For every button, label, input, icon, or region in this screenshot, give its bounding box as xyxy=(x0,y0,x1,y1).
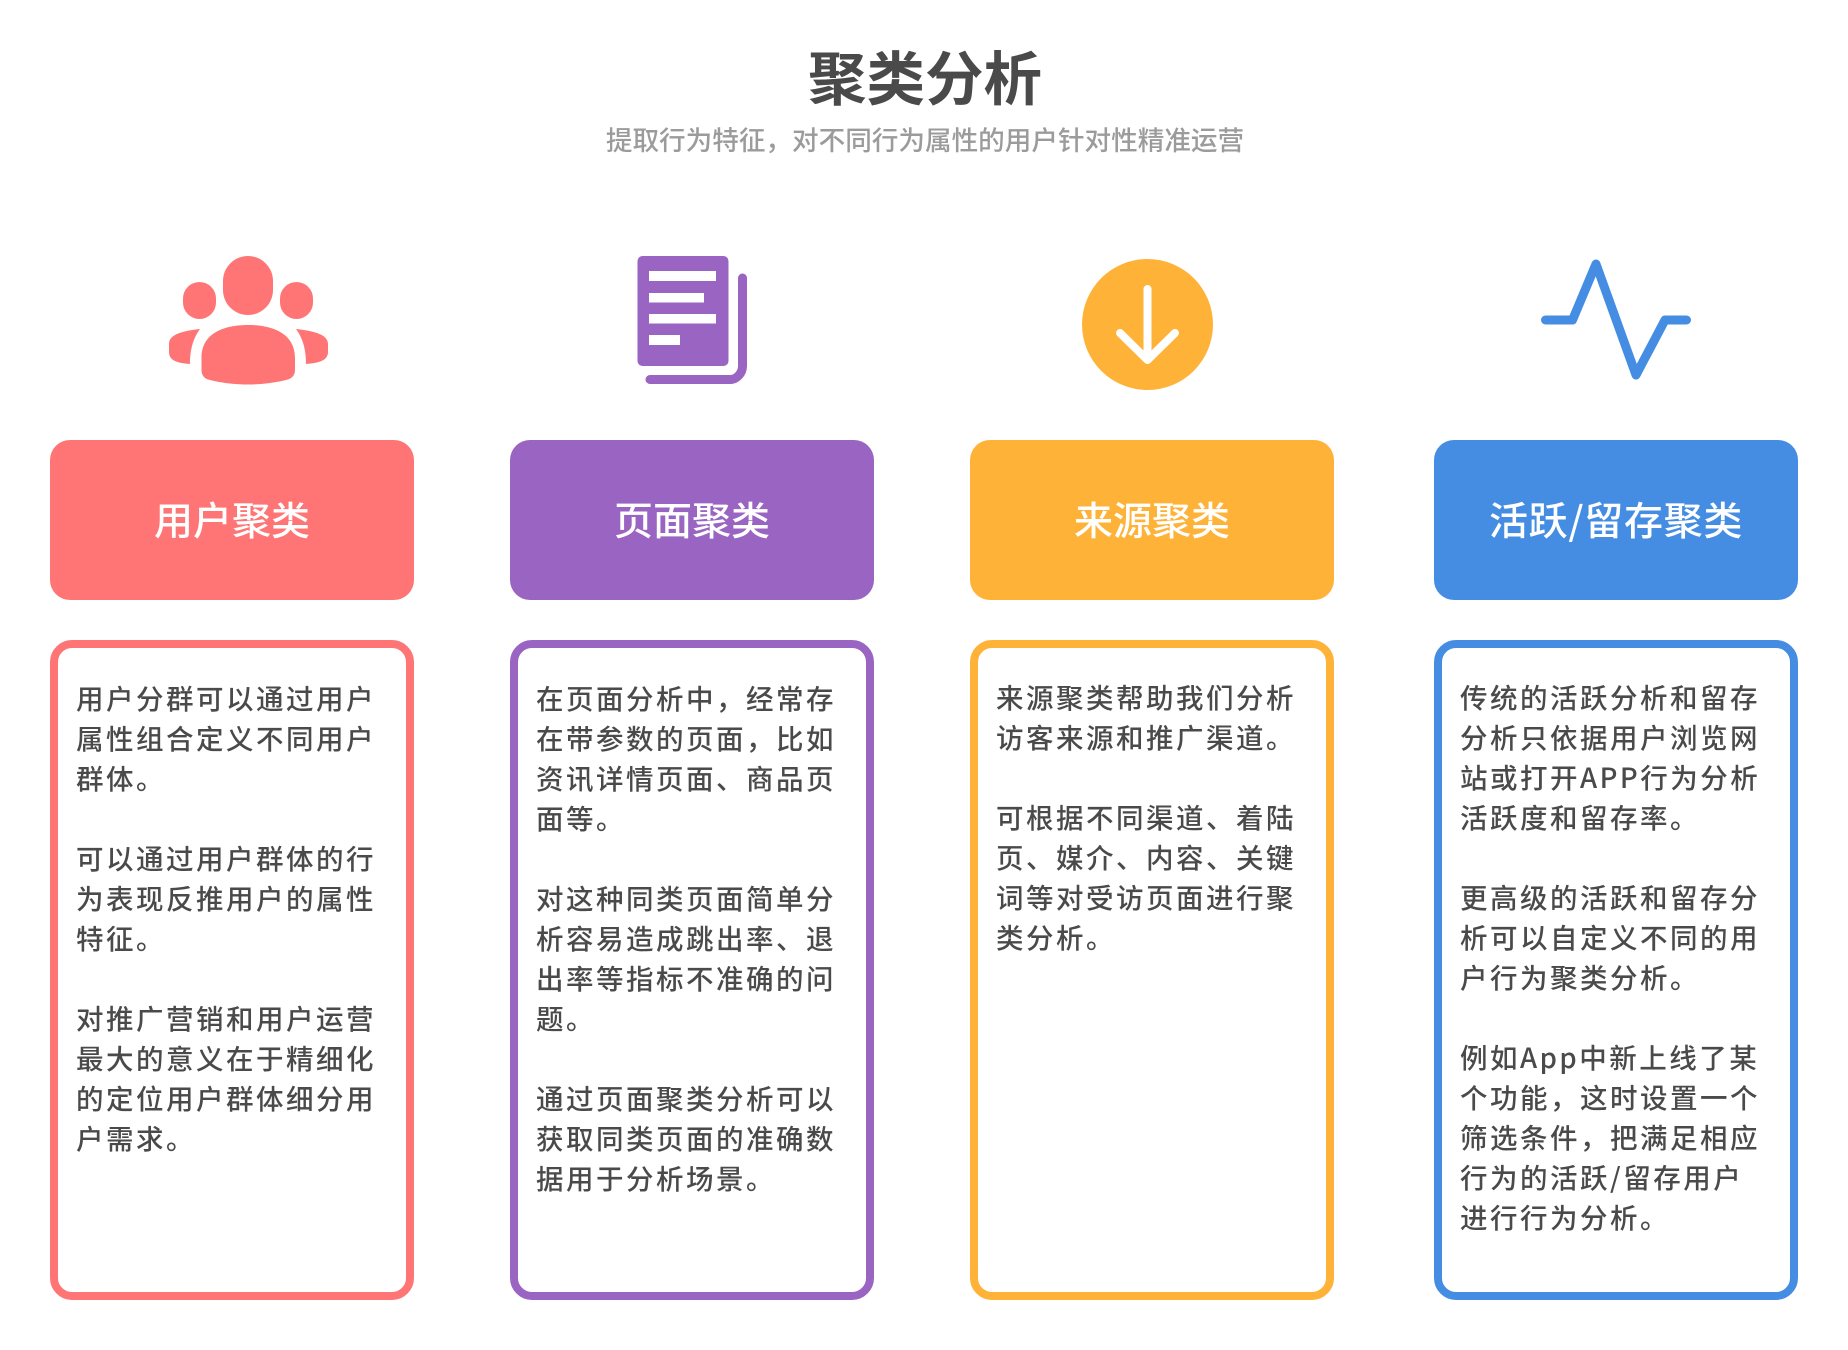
header label: page clustering: 页面聚类 xyxy=(614,490,770,546)
text: user clustering: 对推广营销和用户运营 xyxy=(76,996,376,1036)
text: page clustering: 获取同类页面的准确数 xyxy=(536,1116,836,1156)
text: activity and retention clustering: 进行行为分析。 xyxy=(1460,1196,1670,1236)
text: user clustering: 为表现反推用户的属性 xyxy=(76,876,376,916)
text: page clustering xyxy=(536,676,836,1196)
text: activity and retention clustering: 例如App中新上线了某 xyxy=(1460,1036,1759,1076)
text: activity and retention clustering: 行为的活跃/留存用户 xyxy=(1460,1156,1743,1196)
text: source clustering: 来源聚类帮助我们分析 xyxy=(996,676,1296,716)
text: user clustering: 可以通过用户群体的行 xyxy=(76,836,376,876)
text: page clustering: 通过页面聚类分析可以 xyxy=(536,1076,836,1116)
icon: activity pulse xyxy=(1541,260,1691,380)
icon: users xyxy=(169,256,328,384)
text: source clustering: 词等对受访页面进行聚 xyxy=(996,876,1296,916)
text: source clustering: 页、媒介、内容、关键 xyxy=(996,836,1296,876)
text: user clustering: 特征。 xyxy=(76,916,166,956)
icon: download arrow circle xyxy=(1082,259,1213,390)
text: user clustering: 用户分群可以通过用户 xyxy=(76,676,376,716)
text: user clustering: 属性组合定义不同用户 xyxy=(76,716,376,756)
header: user clustering xyxy=(50,440,414,600)
text: activity and retention clustering: 个功能，这时设置一个 xyxy=(1460,1076,1760,1116)
icon: document xyxy=(638,256,747,384)
text: page clustering: 据用于分析场景。 xyxy=(536,1156,776,1196)
text: user clustering: 的定位用户群体细分用 xyxy=(76,1076,376,1116)
panel: activity and retention clustering xyxy=(1434,640,1798,1300)
text: page clustering: 面等。 xyxy=(536,796,626,836)
text: activity and retention clustering: 更高级的活跃和留存分 xyxy=(1460,876,1760,916)
text: user clustering: 群体。 xyxy=(76,756,166,796)
text: source clustering: 类分析。 xyxy=(996,916,1116,956)
text: page clustering: 析容易造成跳出率、退 xyxy=(536,916,836,956)
text: source clustering: 访客来源和推广渠道。 xyxy=(996,716,1296,756)
text: user clustering: 户需求。 xyxy=(76,1116,196,1156)
text: page clustering: 对这种同类页面简单分 xyxy=(536,876,836,916)
text: activity and retention clustering: 站或打开APP行为分析 xyxy=(1460,756,1760,796)
header label: source clustering: 来源聚类 xyxy=(1074,490,1230,546)
text: source clustering xyxy=(996,676,1296,956)
text: activity and retention clustering: 分析只依据用户浏览网 xyxy=(1460,716,1760,756)
text: activity and retention clustering: 传统的活跃分析和留存 xyxy=(1460,676,1760,716)
text: user clustering: 最大的意义在于精细化 xyxy=(76,1036,376,1076)
text: activity and retention clustering: 析可以自定义不同的用 xyxy=(1460,916,1760,956)
text: activity and retention clustering: 户行为聚类分析。 xyxy=(1460,956,1700,996)
text: user clustering xyxy=(76,676,376,1156)
header label: user clustering: 用户聚类 xyxy=(154,490,310,546)
header: source clustering xyxy=(970,440,1334,600)
title: 聚类分析 xyxy=(808,48,1042,113)
text: page clustering: 资讯详情页面、商品页 xyxy=(536,756,836,796)
panel: page clustering xyxy=(510,640,874,1300)
text: source clustering: 可根据不同渠道、着陆 xyxy=(996,796,1296,836)
text: page clustering: 在页面分析中，经常存 xyxy=(536,676,836,716)
subtitle: 提取行为特征，对不同行为属性的用户针对性精准运营 xyxy=(606,126,1244,156)
text: page clustering: 题。 xyxy=(536,996,596,1036)
text: activity and retention clustering xyxy=(1460,676,1760,1236)
text: activity and retention clustering: 活跃度和留存率。 xyxy=(1460,796,1700,836)
panel: user clustering xyxy=(50,640,414,1300)
text: activity and retention clustering: 筛选条件，把满足相应 xyxy=(1460,1116,1760,1156)
text: page clustering: 在带参数的页面，比如 xyxy=(536,716,836,756)
header: activity and retention clustering xyxy=(1434,440,1798,600)
header label: activity and retention clustering: 活跃/留存聚类 xyxy=(1489,490,1743,546)
header: page clustering xyxy=(510,440,874,600)
text: page clustering: 出率等指标不准确的问 xyxy=(536,956,836,996)
panel: source clustering xyxy=(970,640,1334,1300)
